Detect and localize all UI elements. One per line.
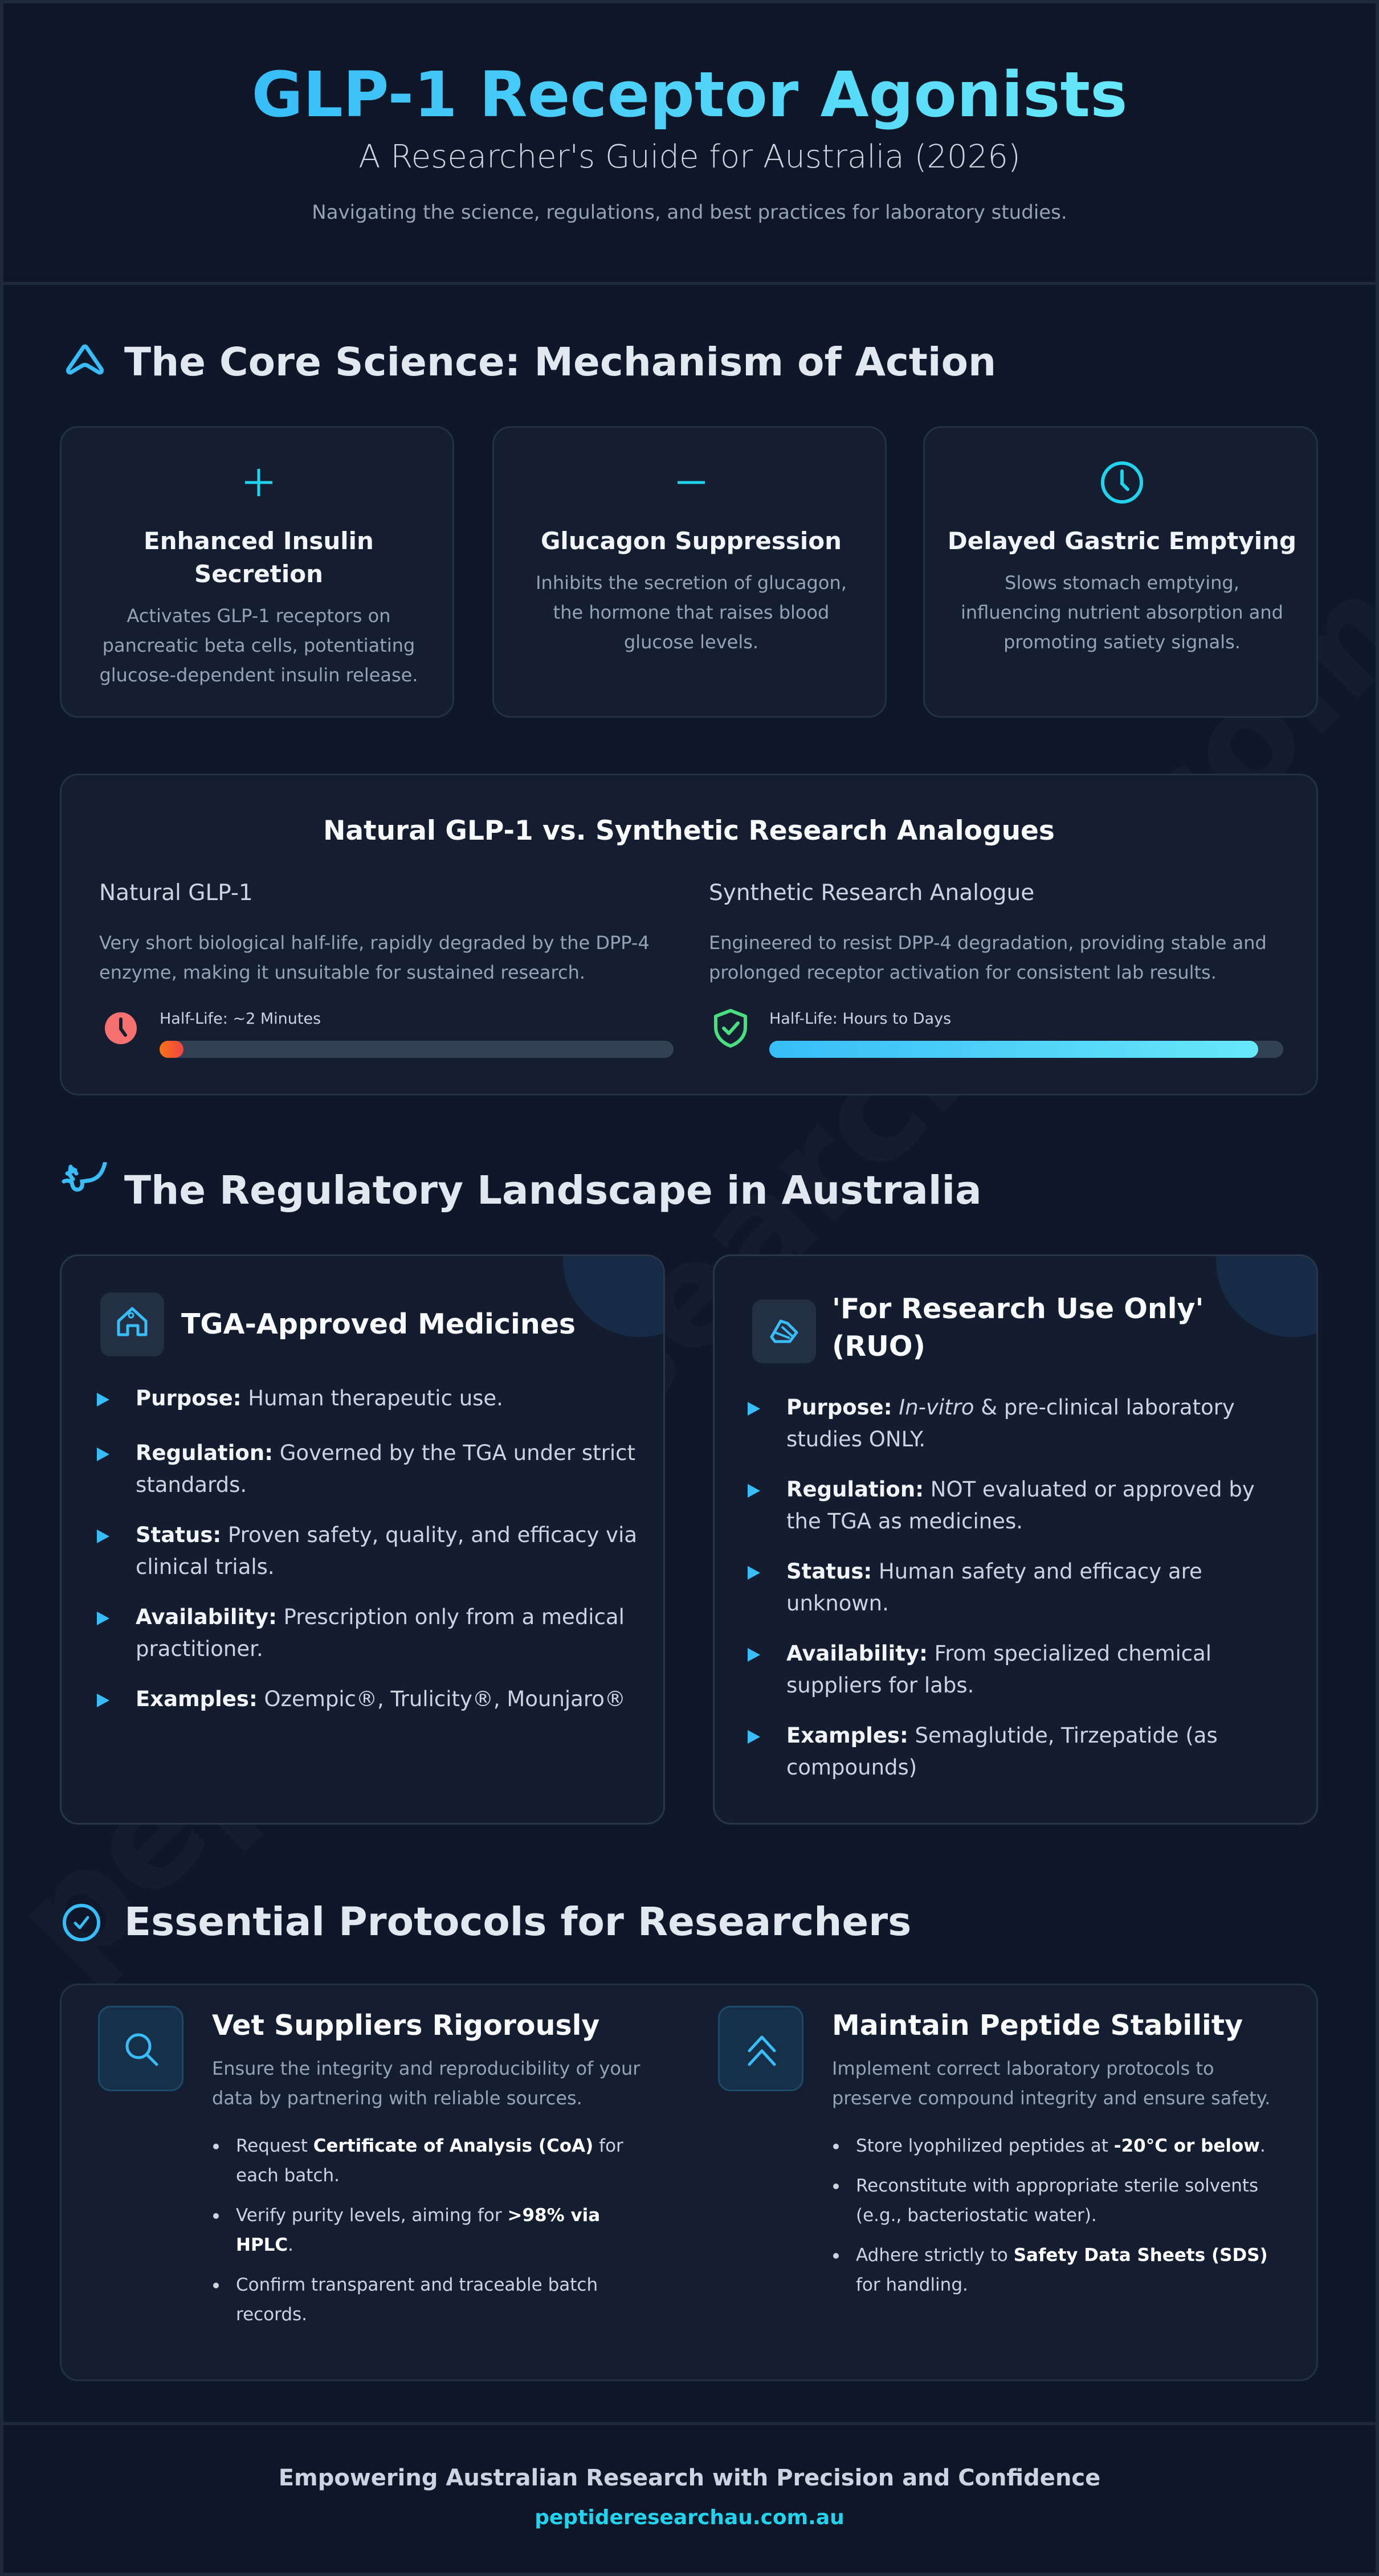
footer bbox=[0, 2422, 1379, 2576]
natural column: Very short biological half-life, rapidly degraded by the DPP-4 enzyme, making it unsuitable for sustained research. bbox=[99, 932, 650, 983]
list: TGA bbox=[97, 1386, 637, 1711]
column: vet suppliers: Confirm transparent and traceable batch records. bbox=[236, 2275, 598, 2325]
panel: TGA approved: TGA-Approved Medicines bbox=[181, 1308, 576, 1340]
panel: RUO: 'For Research Use Only' bbox=[832, 1293, 1203, 1325]
list: TGA: Status: Proven safety, quality, and efficacy via clinical trials. bbox=[136, 1523, 637, 1579]
panel: protocols bbox=[60, 1984, 1318, 2381]
title: GLP-1 Receptor Agonists bbox=[251, 58, 1128, 131]
natural column bbox=[99, 880, 674, 1058]
card: glucagon: Inhibits the secretion of glucagon, the hormone that raises blood glucose levels. bbox=[536, 572, 847, 653]
column: vet suppliers: Vet Suppliers Rigorously bbox=[212, 2009, 599, 2042]
column: vet suppliers: Ensure the integrity and reproducibility of your data by partnering with reliable sources. bbox=[212, 2058, 640, 2109]
panel: TGA approved bbox=[60, 1254, 665, 1825]
list: RUO: Availability: From specialized chemical suppliers for labs. bbox=[786, 1641, 1211, 1698]
header bbox=[0, 0, 1379, 285]
column: vet suppliers: Request Certificate of Analysis (CoA) for each batch. bbox=[236, 2136, 623, 2186]
icon: red clock bbox=[105, 1012, 137, 1044]
tagline: Navigating the science, regulations, and best practices for laboratory studies. bbox=[312, 201, 1067, 224]
list: RUO bbox=[748, 1395, 1255, 1780]
icon: double chevron bbox=[718, 2006, 803, 2091]
natural column: Natural GLP-1 bbox=[99, 880, 253, 906]
column: stability: Maintain Peptide Stability bbox=[832, 2009, 1243, 2042]
card: insulin: Activates GLP-1 receptors on pancreatic beta cells, potentiating glucose-dependent insulin release. bbox=[99, 605, 418, 686]
list: RUO: Status: Human safety and efficacy are unknown. bbox=[786, 1559, 1202, 1616]
list: TGA: Purpose: Human therapeutic use. bbox=[136, 1386, 503, 1410]
card: insulin: Secretion bbox=[194, 560, 323, 588]
column: stability: Adhere strictly to Safety Data Sheets (SDS) for handling. bbox=[856, 2245, 1268, 2295]
bar: short bbox=[160, 1041, 674, 1058]
footer: peptideresearchau.com.au bbox=[535, 2506, 844, 2529]
icon: clock bbox=[1101, 461, 1143, 504]
icon: flask bbox=[752, 1299, 816, 1363]
panel: RUO bbox=[713, 1254, 1318, 1825]
section heading: regulatory: The Regulatory Landscape in Australia bbox=[124, 1168, 982, 1213]
card: gastric: Delayed Gastric Emptying bbox=[948, 527, 1296, 555]
synthetic column: Synthetic Research Analogue bbox=[709, 880, 1034, 906]
synthetic column: Half-Life: Hours to Days bbox=[769, 1010, 951, 1028]
icon: check circle bbox=[63, 1904, 100, 1941]
decorative circle bbox=[1216, 1183, 1370, 1337]
synthetic column: Engineered to resist DPP-4 degradation, providing stable and prolonged receptor activation for consistent lab results. bbox=[709, 932, 1267, 983]
footer: Empowering Australian Research with Precision and Confidence bbox=[279, 2465, 1100, 2491]
column: vet suppliers: Verify purity levels, aiming for >98% via HPLC. bbox=[236, 2205, 600, 2255]
list: RUO: Purpose: In-vitro & pre-clinical laboratory studies ONLY. bbox=[786, 1395, 1235, 1451]
section heading: core science: The Core Science: Mechanism of Action bbox=[124, 340, 996, 385]
panel: RUO: (RUO) bbox=[832, 1330, 925, 1363]
icon: plus bbox=[245, 469, 272, 496]
subtitle: A Researcher's Guide for Australia (2026) bbox=[358, 138, 1021, 175]
icon: chevron bbox=[66, 344, 104, 375]
column: stability: Implement correct laboratory protocols to preserve compound integrity and ensure safety. bbox=[832, 2058, 1270, 2109]
synthetic column bbox=[709, 880, 1283, 1058]
column: stability bbox=[718, 2006, 1270, 2295]
column: stability: Reconstitute with appropriate sterile solvents (e.g., bacteriostatic water). bbox=[856, 2176, 1258, 2226]
panel: natural vs synthetic bbox=[60, 774, 1318, 1095]
icon: search bbox=[98, 2006, 183, 2091]
card: gastric bbox=[923, 426, 1318, 718]
icon: shield bbox=[714, 1009, 747, 1048]
card: insulin bbox=[60, 426, 454, 718]
card: gastric: Slows stomach emptying, influencing nutrient absorption and promoting satiety signals. bbox=[961, 572, 1283, 653]
section heading: protocols: Essential Protocols for Researchers bbox=[124, 1899, 911, 1945]
icon: house bbox=[100, 1293, 164, 1356]
bar: long bbox=[769, 1041, 1283, 1058]
icon: minus bbox=[678, 481, 705, 484]
list: RUO: Examples: Semaglutide, Tirzepatide (as compounds) bbox=[786, 1723, 1218, 1780]
card: insulin: Enhanced Insulin bbox=[144, 527, 374, 555]
natural column: Half-Life: ~2 Minutes bbox=[160, 1010, 321, 1028]
list: RUO: Regulation: NOT evaluated or approved by the TGA as medicines. bbox=[786, 1477, 1255, 1534]
card: glucagon: Glucagon Suppression bbox=[541, 527, 842, 555]
decorative circle bbox=[563, 1183, 717, 1337]
list: TGA: Regulation: Governed by the TGA under strict standards. bbox=[136, 1441, 635, 1497]
icon: regulatory bbox=[62, 1162, 107, 1192]
column: vet suppliers bbox=[98, 2006, 640, 2325]
panel: natural vs synthetic: Natural GLP-1 vs. Synthetic Research Analogues bbox=[323, 815, 1055, 847]
card: glucagon bbox=[492, 426, 887, 718]
list: TGA: Availability: Prescription only from a medical practitioner. bbox=[136, 1605, 625, 1661]
column: stability: Store lyophilized peptides at -20°C or below. bbox=[856, 2136, 1266, 2156]
list: TGA: Examples: Ozempic®, Trulicity®, Mounjaro® bbox=[136, 1687, 626, 1711]
